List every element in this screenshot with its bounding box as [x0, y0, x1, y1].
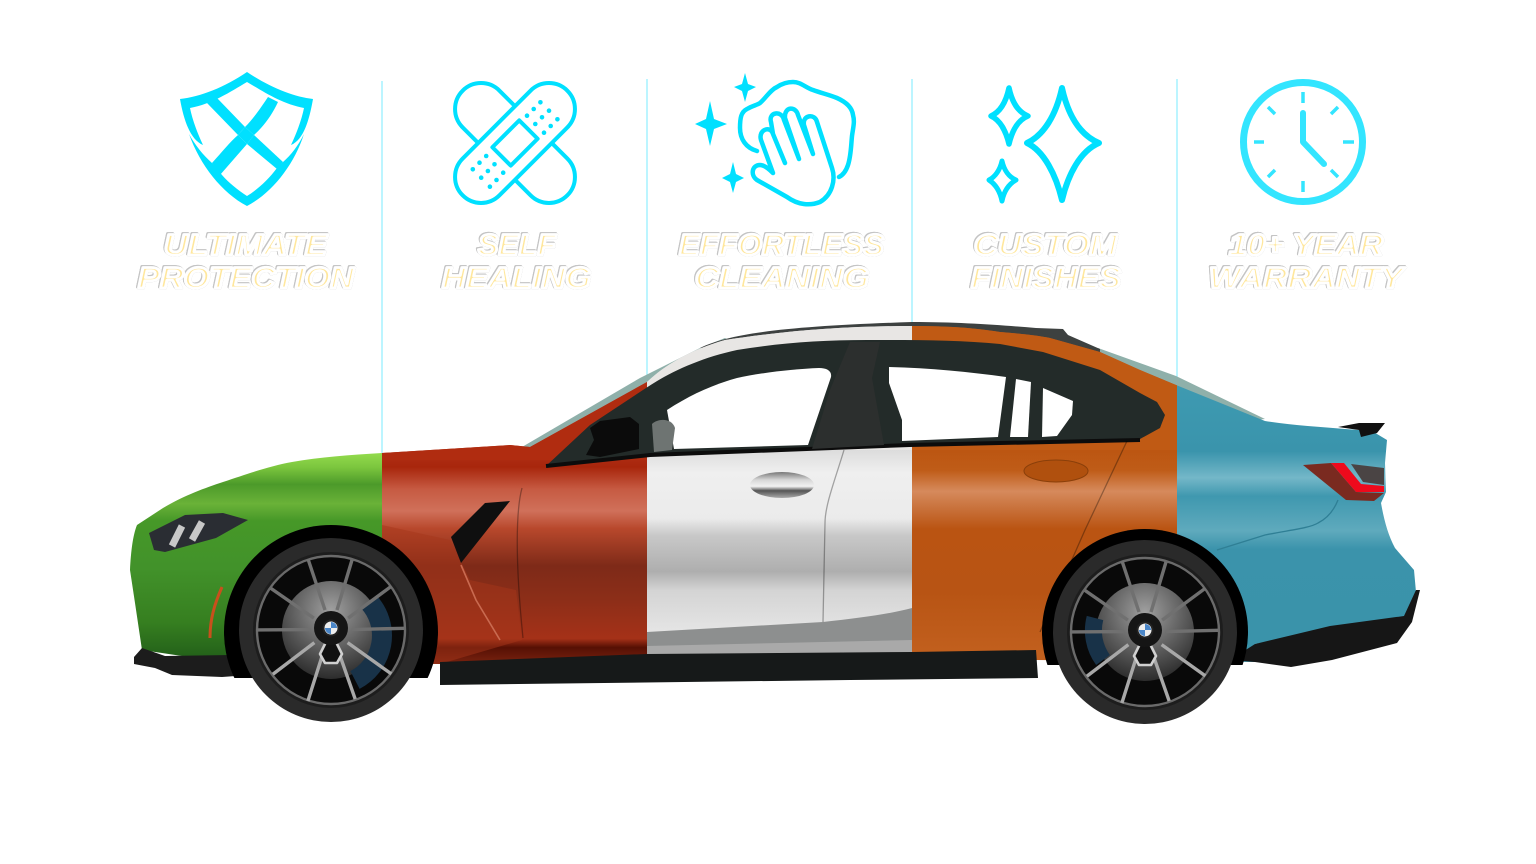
side marker	[210, 587, 222, 638]
heading: ultimate protection: ULTIMATE	[164, 229, 328, 262]
quarter window	[1010, 379, 1031, 437]
front wheel arch	[224, 525, 438, 678]
spoiler	[1338, 423, 1385, 437]
icon: hand wiping with sparkles	[695, 73, 854, 204]
icon: shield	[180, 72, 313, 206]
heading: custom finishes: CUSTOM	[974, 229, 1118, 262]
green panel	[130, 453, 382, 656]
heading: self healing	[442, 229, 591, 295]
front wheel	[239, 538, 423, 722]
teal panel	[1177, 386, 1416, 662]
b-pillar	[812, 342, 884, 449]
icon: sparkles	[989, 88, 1099, 201]
heading: self healing: SELF	[478, 229, 557, 262]
windshield and rear glass strips	[522, 338, 1265, 452]
beltline	[546, 440, 1140, 466]
orange door handle	[1024, 460, 1088, 482]
heading: 10+ year warranty	[1209, 229, 1406, 295]
heading: effortless cleaning	[679, 229, 884, 295]
tail light	[1303, 463, 1384, 501]
white panel	[647, 326, 912, 632]
heading: effortless cleaning: CLEANING	[695, 262, 869, 295]
icon: clock	[1244, 82, 1362, 202]
heading: self healing: HEALING	[442, 262, 591, 295]
front bumper lip	[134, 648, 236, 677]
front window	[667, 368, 831, 449]
car illustration	[120, 320, 1427, 739]
heading: effortless cleaning: EFFORTLESS	[679, 229, 884, 262]
heading: ultimate protection	[138, 229, 355, 295]
icon: crossed bandages	[444, 72, 586, 214]
red panel	[382, 370, 647, 680]
heading: custom finishes	[971, 229, 1121, 295]
white lower sill shadow	[647, 608, 912, 646]
heading: 10+ year warranty: 10+ YEAR	[1229, 229, 1383, 262]
red fender shading	[382, 525, 522, 664]
side mirror	[586, 417, 639, 457]
infographic canvas	[130, 72, 1420, 724]
side skirt	[440, 650, 1038, 685]
fender vent	[451, 501, 510, 563]
window frame	[546, 340, 1165, 466]
roof trim	[700, 322, 1100, 360]
heading: 10+ year warranty: WARRANTY	[1209, 262, 1406, 295]
painted body panels	[120, 320, 1427, 680]
heading: custom finishes: FINISHES	[971, 262, 1121, 295]
rear bumper	[1230, 590, 1420, 667]
heading: ultimate protection: PROTECTION	[138, 262, 355, 295]
seat	[652, 420, 675, 452]
door seams	[517, 441, 1127, 638]
rear quarter crease	[1217, 500, 1338, 550]
headlight	[149, 513, 248, 552]
rear wheel	[1053, 540, 1237, 724]
divider lines	[382, 79, 1177, 453]
orange panel	[912, 320, 1177, 680]
white door handle	[750, 472, 814, 498]
rear wheel arch	[1042, 529, 1248, 665]
rear quarter glass	[1042, 388, 1073, 437]
rear window	[889, 367, 1006, 441]
fender crease	[461, 565, 500, 640]
